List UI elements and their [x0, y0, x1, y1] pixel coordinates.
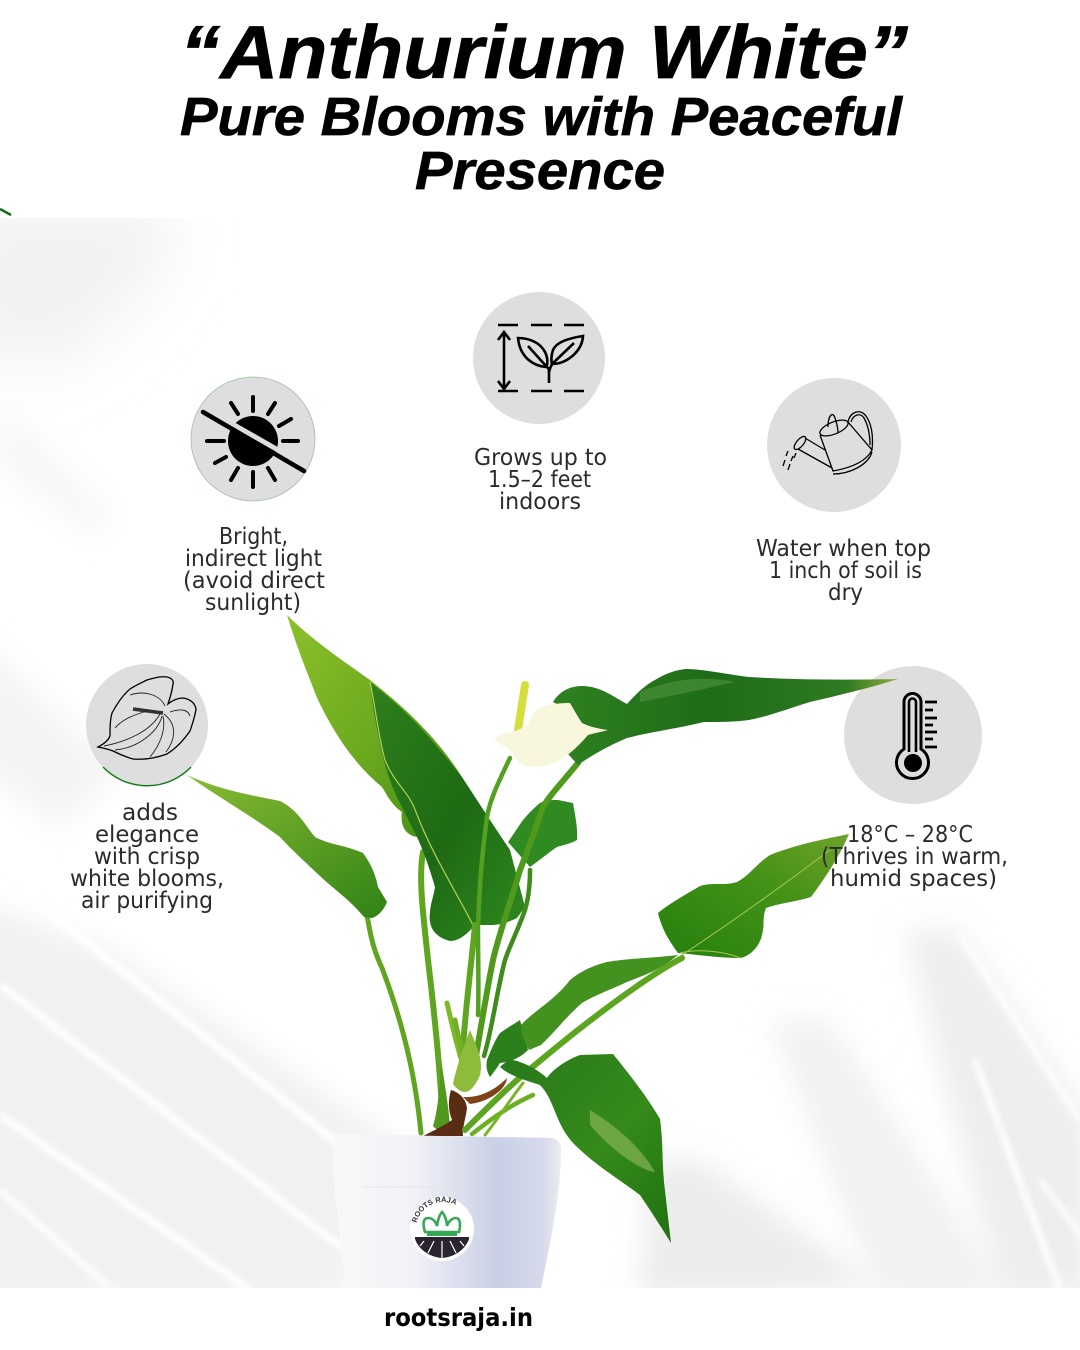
pot label logo	[410, 1196, 474, 1261]
label: height: Grows up to	[474, 445, 607, 471]
label: air purifying: with crisp	[94, 844, 200, 870]
icon: plant height	[473, 292, 605, 424]
pot	[333, 1134, 561, 1288]
label: water	[756, 536, 931, 606]
stem base left	[433, 1060, 450, 1130]
label: light	[183, 524, 325, 616]
label: air purifying: air purifying	[81, 888, 213, 914]
label: temperature: humid spaces)	[830, 866, 997, 892]
stems in front	[447, 758, 578, 1068]
label: air purifying: adds	[122, 800, 178, 826]
flower spadix	[518, 685, 525, 730]
label: temperature: 18°C – 28°C	[847, 822, 973, 848]
label: water: Water when top	[756, 536, 931, 562]
pot sticker outline	[362, 1137, 452, 1187]
flower spathe	[494, 703, 608, 767]
leaf: small middle	[508, 800, 577, 867]
label: air purifying	[70, 800, 224, 914]
leaf: left	[187, 775, 387, 918]
footer url: rootsraja.in	[384, 1303, 533, 1332]
icon: crossed-out sun	[191, 377, 315, 501]
title: “Anthurium White”	[180, 10, 909, 94]
leaf: upper light	[287, 615, 462, 837]
label: height	[474, 445, 607, 515]
leaf: lower behind	[486, 1020, 528, 1077]
label: water: dry	[828, 580, 863, 606]
label: air purifying: white blooms,	[70, 866, 224, 892]
leaf highlight	[640, 679, 735, 702]
leaf rib right	[680, 850, 830, 958]
lower right stems	[465, 958, 682, 1135]
label: light: indirect light	[185, 546, 322, 572]
pot label logo: ROOTS RAJA	[412, 1196, 456, 1222]
leaf: bottom	[500, 1054, 671, 1243]
title	[180, 10, 909, 201]
leaf: upper dark	[370, 682, 525, 941]
plant photo illustration	[187, 615, 898, 1288]
label: temperature	[821, 822, 1008, 892]
leaf: lower wavy	[521, 955, 678, 1050]
label: air purifying: elegance	[95, 822, 199, 848]
label: height: 1.5–2 feet	[488, 467, 591, 493]
leaf rib	[370, 682, 473, 925]
stems behind leaves	[367, 852, 442, 1133]
icon: thermometer	[844, 666, 982, 804]
icon: watering can	[767, 378, 901, 512]
label: light: (avoid direct	[183, 568, 325, 594]
leaf: right	[658, 834, 849, 958]
title: Pure Blooms with Peaceful	[180, 87, 903, 147]
roots and soil	[423, 1078, 507, 1136]
stem base sheath	[453, 1030, 481, 1092]
leaf: top right	[553, 669, 898, 765]
label: light: Bright,	[219, 524, 288, 550]
decorative corner mark	[0, 209, 11, 215]
title: Presence	[415, 141, 665, 201]
label: light: sunlight)	[205, 590, 301, 616]
label: height: indoors	[499, 489, 581, 515]
icon: anthurium flower outline	[86, 664, 208, 786]
leaf highlight bottom	[590, 1110, 655, 1172]
label: temperature: (Thrives in warm,	[821, 844, 1008, 870]
label: water: 1 inch of soil is	[769, 558, 922, 584]
